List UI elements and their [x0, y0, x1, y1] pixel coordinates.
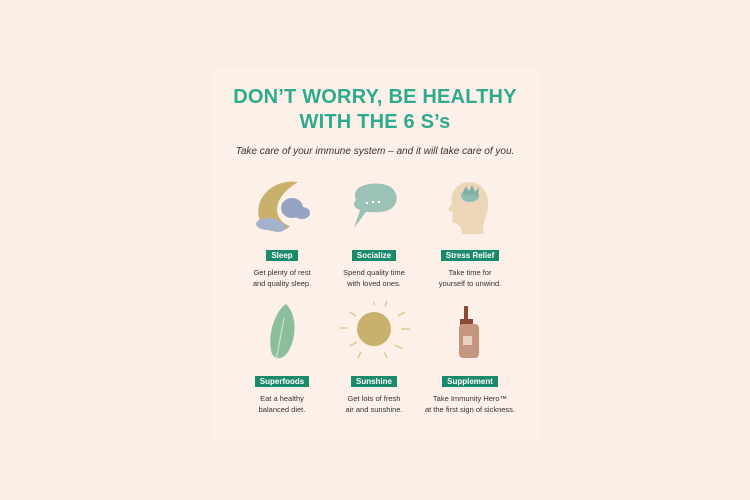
item: superfoods: Eat a healthy: [260, 394, 304, 403]
item: supplement: [425, 376, 515, 414]
subtitle: Take care of your immune system – and it will take care of you.: [236, 146, 514, 157]
item: superfoods: Superfoods: [260, 377, 304, 386]
item: socialize: with loved ones.: [347, 279, 401, 288]
title: DON’T WORRY, BE HEALTHY: [233, 86, 517, 108]
item: supplement: Take Immunity Hero™: [433, 394, 507, 403]
item: stress relief: [438, 250, 501, 288]
item: socialize: [343, 250, 405, 288]
item: stress relief: Take time for: [449, 268, 491, 277]
background panel: [212, 68, 540, 440]
item: socialize: Spend quality time: [343, 268, 405, 277]
item: sunshine: [345, 376, 403, 414]
item: stress relief: yourself to unwind.: [439, 279, 501, 288]
icon: supplement bottle: [459, 306, 479, 358]
item: sleep: Get plenty of rest: [253, 268, 311, 277]
icon: sun: [340, 301, 410, 358]
item: sunshine: Get lots of fresh: [348, 394, 400, 403]
title: WITH THE 6 S’s: [300, 111, 450, 133]
icon: speech bubble: [354, 184, 397, 228]
item: sleep: [253, 250, 311, 288]
item: supplement: at the first sign of sickness.: [425, 405, 515, 414]
item: sleep: and quality sleep.: [253, 279, 311, 288]
icon: leaf: [270, 304, 294, 361]
item: sunshine: air and sunshine.: [345, 405, 403, 414]
title: [233, 86, 517, 133]
item: stress relief: Stress Relief: [446, 251, 494, 260]
item: socialize: Socialize: [357, 251, 391, 260]
item: superfoods: [255, 376, 309, 414]
item: superfoods: balanced diet.: [259, 405, 305, 414]
icon: head with lotus: [448, 182, 488, 234]
item: sleep: Sleep: [271, 251, 293, 260]
item: supplement: Supplement: [447, 377, 493, 386]
item: sunshine: Sunshine: [356, 377, 392, 386]
icon: moon and clouds: [256, 182, 310, 232]
